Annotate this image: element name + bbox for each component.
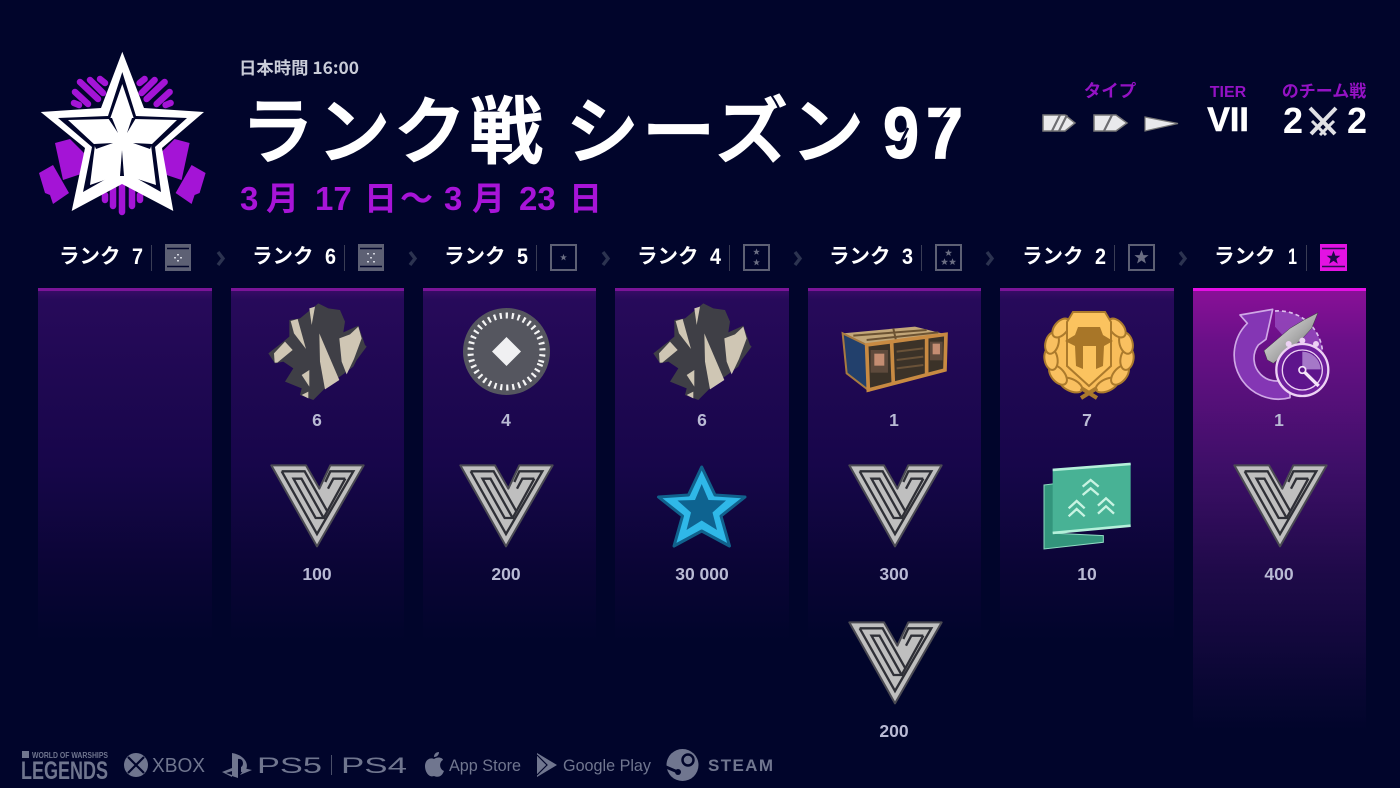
quantity: 7 [1082, 410, 1092, 430]
quantity: 100 [302, 564, 332, 584]
text: event dates: 17 [315, 180, 352, 217]
header: rank 4: ランク [637, 239, 698, 269]
logo: steam [666, 749, 773, 781]
panel: rank 7 [38, 288, 212, 640]
team size 2 vs 2 [1283, 100, 1367, 141]
label: tier: TIER [1210, 84, 1247, 101]
battle type info [1043, 77, 1367, 141]
logo: steam: STEAM [708, 756, 773, 775]
icon: cruiser [1094, 115, 1127, 131]
title season number: 7 [926, 94, 963, 174]
header: rank 7: ランク [59, 239, 120, 269]
panel: rank 5 [423, 288, 596, 640]
logo: app store [425, 752, 521, 777]
quantity: 30 000 [675, 564, 729, 584]
logo: playstation 5 and 4: PS5 [257, 753, 322, 778]
text: event dates: 月 [472, 172, 505, 220]
team size 2 vs 2: 2 [1347, 100, 1367, 141]
icon: reload booster [1234, 309, 1328, 399]
panel: rank 1 [1193, 288, 1366, 730]
label: type: タイプ [1084, 78, 1137, 103]
logo: world of warships legends: LEGENDS [21, 757, 108, 785]
quantity: 200 [879, 721, 909, 741]
quantity: 1 [889, 410, 899, 430]
title season number: 9 [883, 94, 919, 174]
icon: gold laurel medal [1043, 312, 1135, 398]
icon: elite commander xp [849, 465, 942, 546]
panel: rank 6 [231, 288, 404, 640]
icon: green signal flags [1044, 463, 1131, 549]
header: rank 6: ランク [252, 239, 314, 269]
chevron arrow [410, 252, 415, 265]
header: rank 2 [1022, 239, 1154, 271]
quantity: 4 [501, 410, 511, 430]
chevron arrow [603, 252, 608, 265]
text: event dates: 月 [266, 172, 299, 220]
panel: rank 4 [615, 288, 789, 640]
header: rank 3: 3 [902, 244, 913, 269]
icon: elite commander xp [460, 465, 553, 546]
header: rank 5: 5 [517, 244, 528, 269]
icon: elite commander xp [271, 465, 364, 546]
quantity: 10 [1077, 564, 1097, 584]
icon: signal disc [460, 305, 553, 398]
text: event dates: ～ [400, 172, 433, 220]
icon: camouflage [268, 303, 367, 400]
panel: rank 3 [808, 288, 981, 741]
panel: rank 2 [1000, 288, 1174, 640]
text: event dates: 3 [444, 180, 462, 217]
header: rank 5 [444, 239, 576, 271]
header: rank 6 [252, 239, 384, 271]
text: event dates: 3 [240, 180, 258, 217]
logo: app store: App Store [449, 756, 521, 775]
header: rank 1: 1 [1288, 244, 1297, 269]
logo: playstation 5 and 4: PS4 [341, 753, 407, 778]
icon: blue star [658, 467, 745, 546]
icon: ranked battle star emblem [39, 52, 206, 212]
header: rank 6: 6 [325, 244, 336, 269]
header: rank 1 [1214, 239, 1347, 271]
logo: google play: Google Play [563, 756, 651, 775]
logo: xbox: XBOX [152, 755, 205, 777]
icon: camouflage [653, 303, 752, 400]
label: team battle: のチーム戦 [1282, 77, 1366, 102]
logo: playstation 5 and 4 [222, 753, 407, 778]
chevron arrow [1180, 252, 1185, 265]
icon: elite commander xp [849, 622, 942, 703]
header: rank 4 [637, 239, 769, 271]
text: event dates: 日 [569, 172, 602, 220]
header: rank 4: 4 [710, 244, 722, 269]
text: start time: 日本時間 16:00 [239, 54, 359, 79]
icon: destroyer [1043, 115, 1075, 131]
quantity: 200 [491, 564, 521, 584]
title: ランク戦 シーズン [241, 73, 864, 179]
icon: elite commander xp [1234, 465, 1327, 546]
logo: google play [537, 753, 651, 777]
header: rank 3 [829, 239, 961, 271]
header: rank 1: ランク [1214, 239, 1276, 269]
header: rank 3: ランク [829, 239, 890, 269]
rank headers row [59, 239, 1347, 271]
logo: world of warships legends: WORLD OF WARSHIPS [32, 751, 109, 760]
text: event dates [240, 172, 602, 220]
quantity: 6 [312, 410, 322, 430]
header: rank 7: 7 [132, 244, 143, 269]
title season number [883, 94, 963, 174]
tier value: VII [1207, 101, 1249, 139]
logo: world of warships legends [21, 751, 109, 785]
icon: crossed swords [1310, 108, 1336, 135]
header: rank 7 [59, 239, 191, 271]
icon: battleship [1145, 117, 1178, 131]
chevron arrow [987, 252, 992, 265]
quantity: 400 [1264, 564, 1294, 584]
chevron arrow [218, 252, 223, 265]
footer: platform logos [21, 749, 773, 785]
header: rank 2: 2 [1095, 244, 1106, 269]
header: rank 5: ランク [444, 239, 506, 269]
quantity: 6 [697, 410, 707, 430]
chevron arrow [795, 252, 800, 265]
team size 2 vs 2: 2 [1283, 100, 1303, 141]
quantity: 1 [1274, 410, 1284, 430]
header: rank 2: ランク [1022, 239, 1084, 269]
quantity: 300 [879, 564, 909, 584]
text: event dates: 23 [519, 180, 556, 217]
text: event dates: 日 [364, 172, 397, 220]
icon: wooden crate [843, 327, 946, 390]
logo: xbox [124, 753, 205, 777]
